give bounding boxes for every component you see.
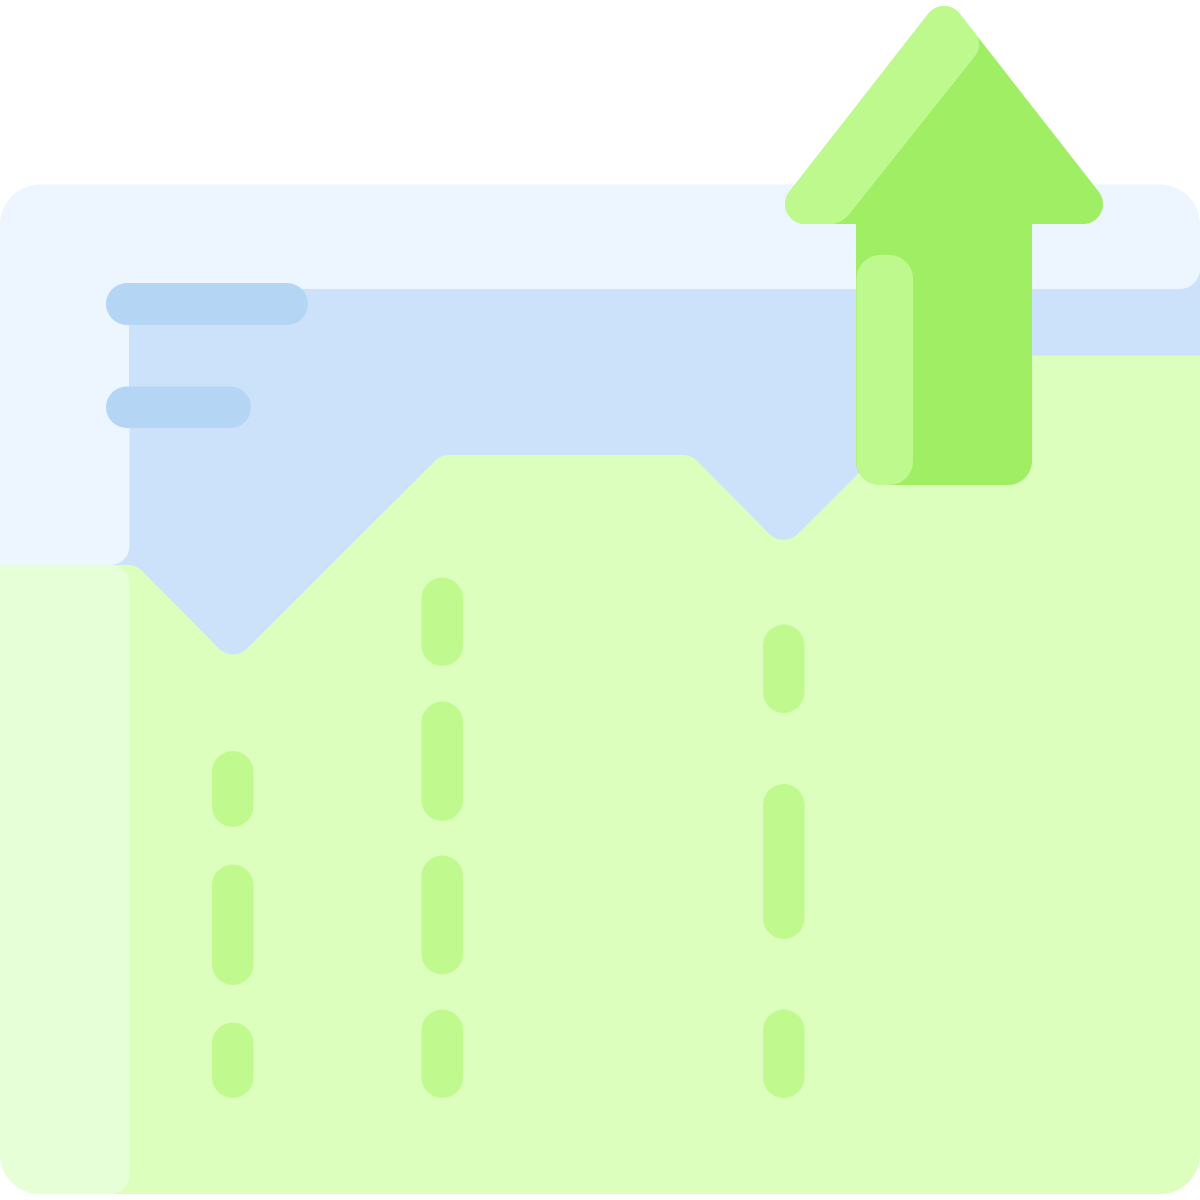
arrow body: [785, 6, 1103, 485]
legend line: short: [106, 386, 251, 428]
panel: chart card background: [0, 184, 1200, 600]
dashed line: first column: [212, 751, 254, 1098]
arrow shaft highlight: [856, 255, 913, 485]
area chart: green rising area: [0, 356, 1200, 1194]
legend line: long: [106, 283, 308, 325]
panel: plot area: [100, 269, 1200, 700]
panel: left margin tab: [0, 400, 130, 565]
dashed line: third column: [763, 624, 804, 1098]
panel: left light strip: [0, 565, 130, 1194]
dashed line: second column: [422, 578, 463, 1098]
icon: up arrow: [785, 6, 1103, 485]
arrow head highlight: [785, 6, 979, 224]
